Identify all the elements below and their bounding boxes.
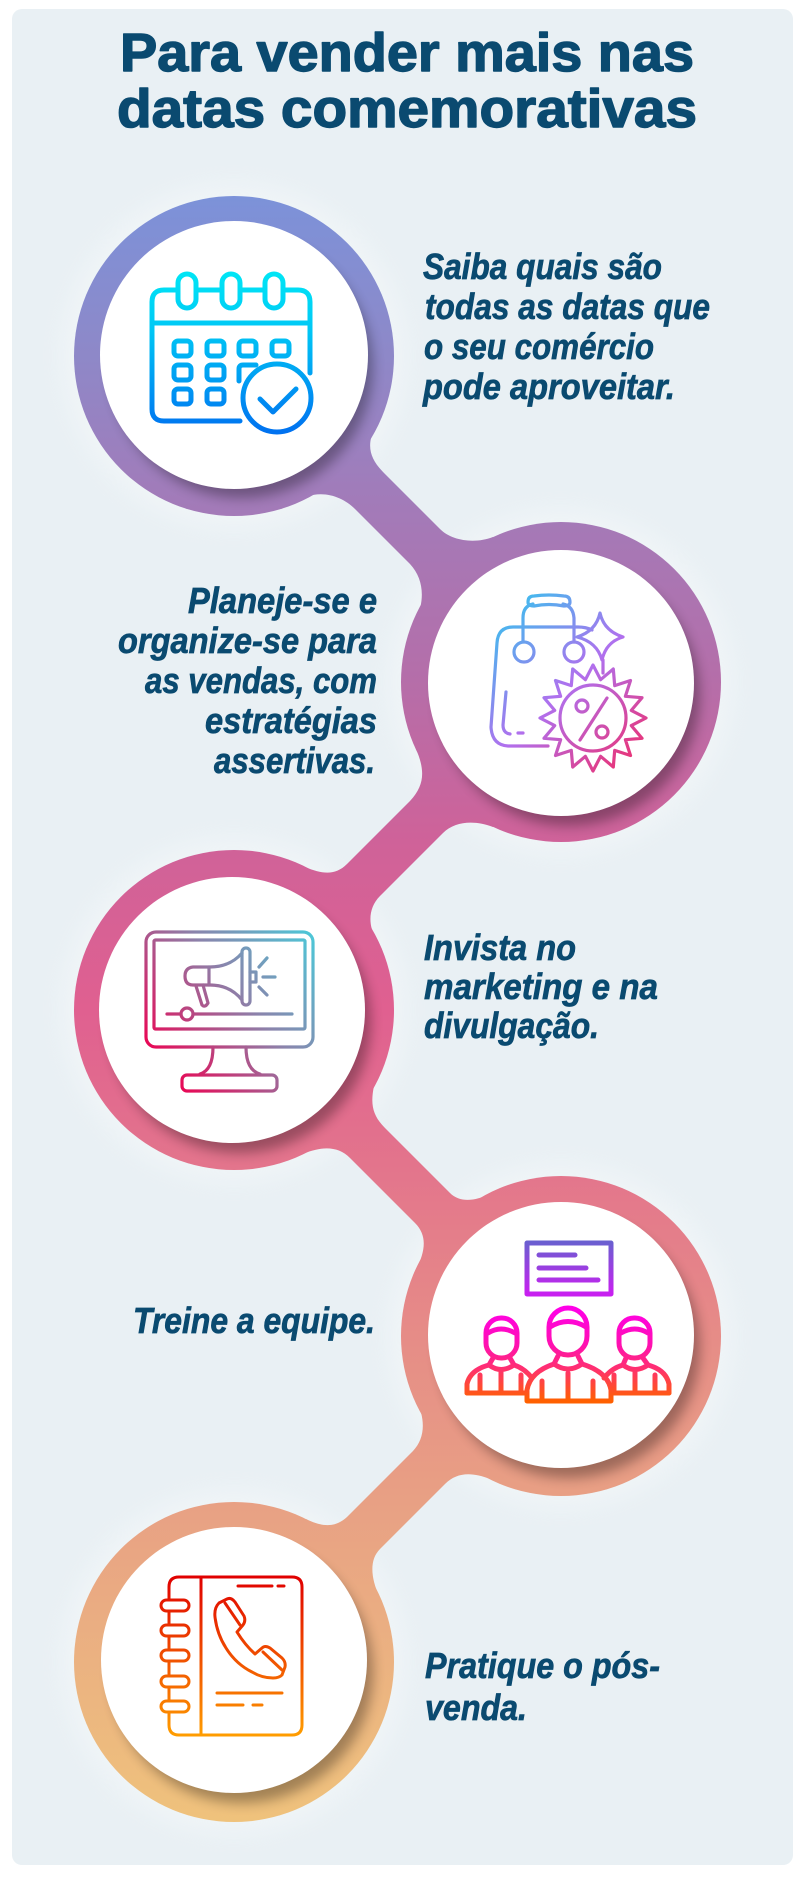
ring glow (62, 184, 733, 1834)
step 5 text (425, 1645, 660, 1728)
step 5 text: Pratique o pós- (425, 1645, 660, 1686)
white circle 2 (428, 550, 694, 816)
step 3 text: divulgação. (424, 1005, 599, 1046)
panel: step 4 (133, 1202, 694, 1468)
step 5 text: venda. (425, 1687, 527, 1728)
step 2 text: organize-se para (118, 620, 377, 661)
step 2 text (118, 580, 377, 781)
step 2 text: as vendas, com (145, 660, 377, 701)
step 2 text: Planeje-se e (188, 580, 377, 621)
circle shadows (109, 236, 700, 1803)
title (117, 23, 697, 139)
step 1 text: pode aproveitar. (422, 366, 675, 407)
step 1 text: todas as datas que (425, 286, 710, 327)
connected gradient ring chain (74, 196, 721, 1822)
white circle 5 (101, 1527, 367, 1793)
title: Para vender mais nas (120, 23, 694, 83)
icon: calendar with check (152, 274, 311, 432)
white circle 4 (428, 1202, 694, 1468)
step 3 text: Invista no (424, 927, 576, 968)
icon: shopping bag with discount seal (491, 595, 646, 771)
step 2 text: estratégias (205, 700, 377, 741)
step 4 text: Treine a equipe. (133, 1300, 375, 1341)
title: datas comemorativas (117, 79, 697, 139)
panel: step 1 (100, 221, 710, 489)
icon: team with presentation card (467, 1243, 669, 1401)
panel: step 3 (99, 877, 658, 1143)
white circle 3 (99, 877, 365, 1143)
panel: step 5 (101, 1527, 660, 1793)
icon: phone address book (161, 1577, 302, 1735)
panel: step 2 (118, 550, 694, 816)
step 1 text: o seu comércio (424, 326, 654, 367)
step 1 text (422, 246, 710, 407)
step 3 text (424, 927, 658, 1046)
white circle 1 (100, 221, 368, 489)
icon: monitor with megaphone (146, 932, 313, 1091)
step 3 text: marketing e na (424, 966, 658, 1007)
step 1 text: Saiba quais são (423, 246, 662, 287)
step 2 text: assertivas. (214, 740, 375, 781)
